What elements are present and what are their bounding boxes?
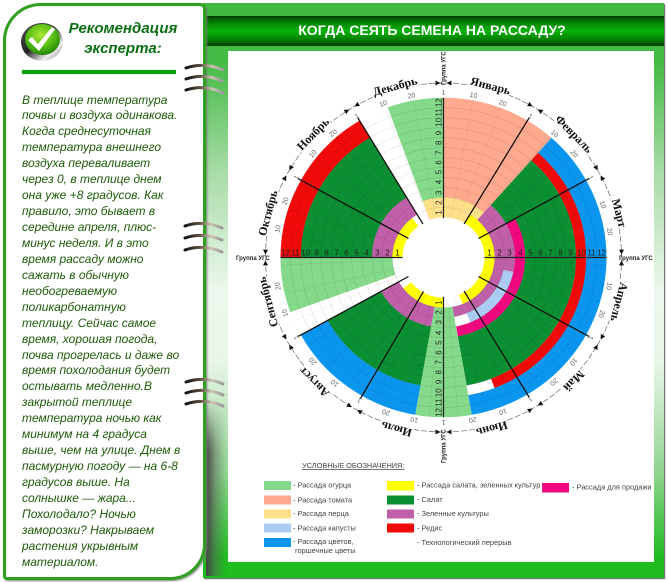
group numbers along axes: 2 bbox=[497, 249, 502, 258]
day numbers around the rim: 10 bbox=[410, 415, 419, 423]
group numbers along axes: 7 bbox=[548, 249, 553, 258]
legend title: УСЛОВНЫЕ ОБОЗНАЧЕНИЯ: bbox=[302, 461, 404, 470]
day numbers around the rim: 20 bbox=[498, 99, 507, 108]
day numbers around the rim: 20 bbox=[548, 376, 559, 387]
axis captions: group UGS: Группа УГС bbox=[442, 429, 448, 463]
rings: greens bbox=[357, 173, 530, 342]
day numbers around the rim: 10 bbox=[549, 129, 559, 139]
group numbers along axes: 6 bbox=[344, 249, 349, 258]
legend labels: - Рассада томата bbox=[293, 496, 353, 504]
month names: Июль bbox=[380, 419, 413, 440]
title bar bbox=[203, 16, 664, 46]
sectors: cucumber seedlings bbox=[300, 117, 587, 398]
day numbers around the rim: 20 bbox=[407, 92, 416, 100]
group numbers along axes: 10 bbox=[577, 249, 587, 258]
month names: Июнь bbox=[475, 418, 509, 440]
legend labels bbox=[293, 480, 652, 555]
day numbers around the rim: 20 bbox=[274, 282, 283, 290]
group numbers along axes: 9 bbox=[568, 249, 573, 258]
group numbers along axes: 5 bbox=[434, 340, 444, 345]
day numbers around the rim: 20 bbox=[308, 356, 319, 366]
month names: Октябрь bbox=[255, 189, 281, 237]
group numbers along axes: 7 bbox=[334, 249, 339, 258]
day numbers around the rim: 20 bbox=[381, 407, 391, 416]
axis captions: group UGS: Группа УГС bbox=[236, 256, 270, 262]
group numbers along axes: 1 bbox=[434, 210, 444, 215]
month names: Май bbox=[560, 368, 588, 395]
group numbers along axes: 12 bbox=[597, 249, 606, 258]
month names: Февраль bbox=[552, 112, 596, 156]
group numbers along axes: 2 bbox=[434, 310, 444, 315]
ring: cabbage seedlings bbox=[365, 180, 522, 335]
group numbers along axes: 11 bbox=[434, 108, 444, 117]
group numbers along axes: 8 bbox=[434, 140, 444, 145]
group numbers along axes: 6 bbox=[434, 160, 444, 165]
day numbers around the rim: 10 bbox=[598, 200, 607, 210]
group numbers along axes: 5 bbox=[434, 169, 444, 174]
group numbers along axes: 2 bbox=[385, 249, 390, 258]
day numbers around the rim: 1 bbox=[526, 394, 533, 402]
group numbers along axes: 9 bbox=[314, 249, 319, 258]
month names: Январь bbox=[469, 74, 512, 98]
group numbers along axes: 8 bbox=[558, 249, 563, 258]
group numbers along axes: 8 bbox=[434, 369, 444, 374]
legend labels: - Рассада цветов, bbox=[293, 537, 354, 546]
day numbers around the rim: 10 bbox=[498, 406, 508, 416]
hooks: bottom group bbox=[186, 379, 223, 406]
group numbers along axes: 8 bbox=[324, 249, 329, 258]
day numbers around the rim: 1 bbox=[293, 334, 301, 340]
text block: expert advice: В теплице температура почвы и воздуха одинакова. Когда среднесуточная температура внешнего воздуха переваливает через 0, в теплице днем она уже +8 градусов. Как правило, это бывает в середине апреля, плюс- минус неделя. И в это время рассаду можно сажать в обычную необогреваемую поликарбонатную теплицу. Сейчас самое время, хорошая погода, почва прогрелась и даже во время похолодания будет остывать медленно.В закрытой теплице температура ночью как минимум на 4 градуса выше, чем на улице. Днем в пасмурную погоду — на 6-8 градусов выше. На солнышке — жара... Похолодало? Ночью заморозки? Накрываем растения укрывным материалом. bbox=[22, 92, 180, 569]
group numbers along axes: 12 bbox=[434, 408, 444, 417]
day numbers around the rim: 10 bbox=[469, 92, 478, 100]
month names: Август bbox=[296, 364, 332, 400]
axis captions: group UGS: Группа УГС bbox=[442, 51, 448, 85]
group numbers along axes: 12 bbox=[281, 249, 290, 258]
day numbers around the rim: 10 bbox=[274, 224, 283, 233]
group numbers along axes: 3 bbox=[375, 249, 380, 258]
day numbers around the rim: 20 bbox=[328, 128, 339, 139]
panel shadow bbox=[206, 400, 226, 576]
group numbers along axes: 10 bbox=[301, 249, 311, 258]
hooks: top group bbox=[186, 65, 223, 93]
legend labels: - Зеленные культуры bbox=[417, 509, 489, 518]
group numbers along axes: 1 bbox=[487, 249, 492, 258]
group numbers along axes: 4 bbox=[434, 330, 444, 335]
day numbers around the rim: 1 bbox=[586, 334, 594, 341]
legend labels: - Технологический перерыв bbox=[417, 538, 512, 547]
ring: seedlings for sale bbox=[339, 155, 548, 360]
month names: Декабрь bbox=[371, 73, 419, 99]
group numbers along axes: 3 bbox=[434, 319, 444, 324]
month names: Апрель bbox=[607, 281, 631, 323]
group numbers along axes bbox=[281, 98, 606, 417]
group numbers along axes: 10 bbox=[434, 388, 444, 397]
day numbers around the rim: 1 bbox=[526, 113, 533, 121]
day numbers around the rim: 1 bbox=[441, 418, 445, 425]
group numbers along axes: 9 bbox=[434, 130, 444, 135]
month names: Ноябрь bbox=[294, 115, 332, 153]
group numbers along axes: 12 bbox=[434, 98, 444, 107]
group numbers along axes: 6 bbox=[434, 350, 444, 355]
group numbers along axes: 1 bbox=[395, 249, 400, 258]
group numbers along axes: 11 bbox=[587, 249, 596, 258]
group numbers along axes: 11 bbox=[434, 398, 444, 407]
day numbers around the rim: 10 bbox=[568, 356, 578, 367]
hooks: middle group bbox=[185, 223, 222, 252]
icon: green check mark bbox=[21, 23, 63, 61]
group numbers along axes: 5 bbox=[354, 249, 359, 258]
group numbers along axes: 6 bbox=[538, 249, 543, 258]
group numbers along axes: 10 bbox=[434, 117, 444, 127]
legend swatches bbox=[264, 481, 569, 547]
group numbers along axes: 4 bbox=[518, 249, 523, 258]
axis captions: group UGS bbox=[236, 51, 653, 463]
legend bbox=[264, 461, 652, 555]
day numbers around the rim: 20 bbox=[468, 415, 477, 423]
panel: expert recommendation bbox=[3, 3, 206, 580]
group numbers along axes: 3 bbox=[507, 249, 512, 258]
title bar: КОГДА СЕЯТЬ СЕМЕНА НА РАССАДУ? bbox=[298, 22, 566, 38]
day numbers around the rim: 10 bbox=[308, 149, 319, 159]
sector: pepper seedlings bbox=[378, 193, 509, 322]
heading: expert recommendation: Рекомендация bbox=[69, 20, 177, 37]
sectors: radish bbox=[249, 67, 638, 448]
day numbers around the rim: 1 bbox=[586, 175, 594, 181]
day numbers around the rim: 1 bbox=[293, 174, 301, 181]
day numbers around the rim: 20 bbox=[605, 228, 613, 236]
group numbers along axes: 7 bbox=[434, 360, 444, 365]
UGS group axes bbox=[280, 98, 606, 417]
group numbers along axes: 11 bbox=[291, 249, 300, 258]
heading: expert recommendation bbox=[68, 20, 178, 57]
group numbers along axes: 4 bbox=[434, 179, 444, 184]
day numbers around the rim: 10 bbox=[330, 378, 340, 388]
legend labels: - Салат bbox=[417, 495, 443, 504]
day numbers around the rim: 20 bbox=[568, 149, 579, 159]
sectors: flower seedlings bbox=[228, 46, 659, 469]
legend labels: горшечные цветы bbox=[295, 546, 356, 555]
day numbers around the rim: 20 bbox=[281, 196, 291, 206]
month names bbox=[254, 73, 631, 440]
legend labels: - Рассада капусты bbox=[293, 524, 356, 532]
day numbers around the rim: 1 bbox=[356, 396, 363, 404]
divider rule bbox=[22, 70, 176, 74]
month names: Сентябрь bbox=[254, 276, 281, 329]
group numbers along axes: 3 bbox=[434, 190, 444, 195]
group numbers along axes: 5 bbox=[528, 249, 533, 258]
heading: expert recommendation: эксперта: bbox=[84, 40, 162, 57]
day numbers around the rim: 1 bbox=[354, 113, 361, 121]
arc arrowheads bbox=[263, 81, 624, 434]
day numbers around the rim: 10 bbox=[604, 282, 613, 291]
day numbers around the rim: 10 bbox=[281, 308, 290, 318]
day numbers around the rim: 1 bbox=[442, 90, 446, 97]
legend labels: - Редис bbox=[417, 524, 443, 532]
dashed month arc bbox=[266, 83, 622, 432]
group numbers along axes: 9 bbox=[434, 379, 444, 384]
day numbers around the rim: 10 bbox=[379, 100, 389, 109]
rings: lettuce and greens seedlings bbox=[380, 196, 507, 319]
group numbers along axes: 1 bbox=[434, 300, 444, 305]
sector: tomato seedlings bbox=[331, 148, 556, 367]
group numbers along axes: 2 bbox=[434, 200, 444, 205]
group numbers along axes: 4 bbox=[364, 249, 369, 258]
group numbers along axes: 7 bbox=[434, 150, 444, 155]
legend labels: - Рассада салата, зеленных культур bbox=[417, 480, 540, 490]
legend labels: - Рассада для продажи bbox=[572, 482, 652, 492]
white chart plate bbox=[228, 51, 654, 562]
axis captions: group UGS: Группа УГС bbox=[619, 256, 653, 262]
day numbers around the rim: 20 bbox=[596, 309, 606, 319]
panel: outer green frame bbox=[203, 3, 664, 578]
legend labels: - Рассада огурца bbox=[293, 480, 352, 490]
legend labels: - Рассада перца bbox=[293, 509, 350, 518]
month names: Март bbox=[609, 197, 630, 229]
month boundary lines bbox=[298, 118, 589, 398]
day numbers around the rim bbox=[274, 90, 613, 425]
sectors: lettuce bbox=[298, 115, 589, 400]
